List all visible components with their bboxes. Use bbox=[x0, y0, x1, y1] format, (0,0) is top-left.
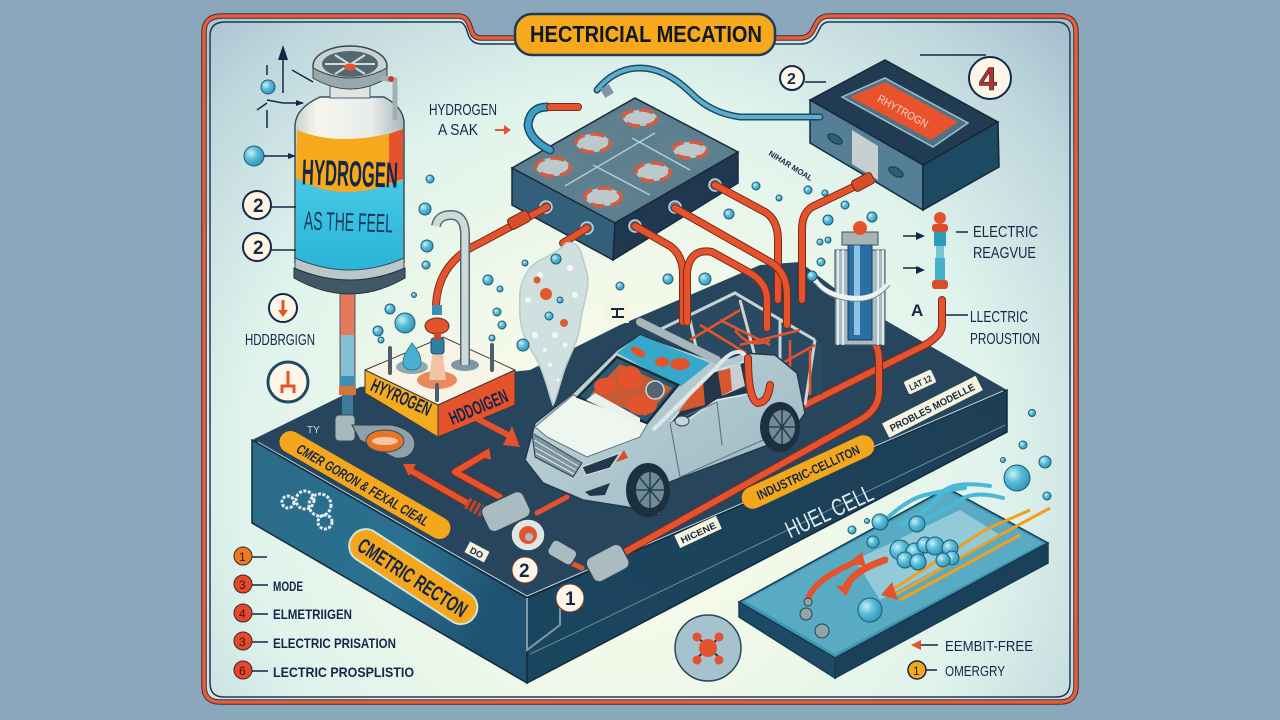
legend bottom left: ELMETRIIGEN bbox=[273, 606, 352, 622]
title: HECTRICIAL MECATION bbox=[530, 21, 762, 47]
gear icon bbox=[282, 491, 332, 529]
legend bottom left: 6 bbox=[239, 664, 246, 678]
flow arrows bbox=[403, 418, 640, 568]
steel nodes bbox=[800, 598, 829, 638]
right side valve column bbox=[903, 212, 968, 315]
stack ports bbox=[540, 179, 721, 234]
side windows bbox=[670, 360, 753, 423]
badge 4 bbox=[920, 55, 1011, 99]
badge 2 valve bbox=[512, 557, 538, 583]
label: electric proustion: LLECTRIC bbox=[970, 309, 1028, 326]
tank body bbox=[295, 97, 404, 262]
hydrogen box bbox=[365, 337, 515, 437]
badge 1 valve bbox=[556, 584, 584, 612]
yellow band bbox=[296, 130, 403, 192]
platform side face bbox=[527, 390, 1007, 683]
pipes: rear loop and long supply bbox=[625, 300, 942, 552]
reactor column bbox=[815, 221, 890, 345]
number badge 2: 2 bbox=[253, 196, 264, 217]
hydrogen box: HYYROGEN bbox=[367, 375, 434, 421]
pipe: blue coolant bbox=[528, 68, 820, 150]
label: hydrogen a sak bbox=[429, 102, 511, 139]
label: electric proustion bbox=[970, 309, 1040, 348]
legend bottom left: 1 bbox=[239, 550, 246, 564]
label: nihar moal: NIHAR MOAL bbox=[767, 149, 814, 183]
legend bottom right: EEMBIT-FREE bbox=[945, 638, 1033, 655]
molecule icon bbox=[675, 615, 741, 681]
bubbles bbox=[373, 175, 877, 351]
pill: cmetric recton: CMETRIC RECTON bbox=[353, 534, 471, 622]
down arrow icon bbox=[269, 294, 297, 322]
mirror bbox=[675, 416, 689, 426]
badge 2 battery: 2 bbox=[787, 71, 796, 88]
legend bottom left: 4 bbox=[239, 607, 246, 621]
lower slab: emission-free output bbox=[739, 410, 1051, 678]
fork icon bbox=[268, 362, 308, 402]
label: a: A bbox=[911, 301, 923, 320]
faucet and valve bbox=[425, 215, 465, 365]
platform front face bbox=[252, 440, 527, 683]
legend bottom left: 3 bbox=[239, 635, 246, 649]
front wheel bbox=[626, 463, 670, 517]
number badge 2 second bbox=[243, 233, 296, 261]
legend bottom right bbox=[908, 638, 1033, 680]
return arrow bbox=[455, 453, 500, 497]
legend bottom left: LECTRIC PROSPLISTIO bbox=[273, 664, 414, 680]
engine bay behind car bbox=[650, 293, 822, 405]
hood bbox=[535, 395, 648, 457]
legend bottom right: 1 bbox=[913, 664, 920, 678]
left callouts bbox=[243, 45, 315, 402]
grille and lamps bbox=[532, 433, 582, 477]
label: hydrogen a sak: HYDROGEN bbox=[429, 102, 497, 119]
label: electric reagvue: REAGVUE bbox=[973, 245, 1036, 262]
badge 4: 4 bbox=[979, 61, 997, 97]
pill: fuel cell label bbox=[275, 427, 455, 543]
badge 2 battery bbox=[780, 66, 826, 90]
supply column bbox=[335, 290, 415, 458]
tags: LAT 12 bbox=[907, 373, 933, 393]
platform bbox=[252, 262, 1007, 683]
legend bottom right: OMERGRY bbox=[945, 663, 1005, 680]
connector link bbox=[352, 425, 415, 458]
arrow to car bbox=[476, 418, 510, 436]
label: hydrogen a sak: A SAK bbox=[438, 122, 478, 139]
red valve bbox=[425, 318, 449, 334]
roof rack bbox=[640, 322, 717, 360]
door lines bbox=[670, 402, 763, 477]
badge 2 valve: 2 bbox=[519, 561, 530, 582]
text: HYDROGEN bbox=[301, 151, 399, 196]
pill: fuel cell label: CMER GORON & FEXAL CIEAL bbox=[294, 440, 432, 529]
fuel cell stack bbox=[512, 98, 738, 260]
tags: TY bbox=[307, 425, 320, 436]
tags: PROBLES MODELLE bbox=[888, 382, 977, 435]
legend bottom left: MODE bbox=[273, 578, 303, 594]
tank text as the feel: AS THE FEEL bbox=[303, 205, 393, 238]
plume speckles bbox=[525, 265, 578, 382]
sunroof panel bbox=[617, 335, 710, 387]
label: electric reagvue bbox=[973, 224, 1038, 262]
tags: HICENE bbox=[679, 520, 718, 545]
hose over door bbox=[748, 358, 770, 403]
number badge 2 second: 2 bbox=[253, 238, 264, 259]
pill: industric cellition: INDUSTRIC-CELLITON bbox=[754, 442, 862, 503]
pipes: stack to engine bbox=[436, 180, 868, 328]
box right face bbox=[438, 370, 515, 437]
car body bbox=[525, 335, 805, 515]
legend bottom left bbox=[234, 547, 414, 680]
wheel valve bbox=[313, 46, 395, 120]
tags: DO bbox=[468, 545, 485, 561]
badge 1 valve: 1 bbox=[565, 589, 576, 610]
orange flow arrows bbox=[884, 508, 1050, 600]
title bbox=[515, 14, 775, 55]
battery box: RHYTROGN bbox=[875, 93, 930, 131]
cyan band bbox=[296, 178, 403, 270]
platform top bbox=[252, 262, 1007, 598]
small icon square bbox=[605, 301, 629, 323]
number badge 2 bbox=[243, 191, 296, 219]
car bbox=[525, 322, 805, 517]
label hddbrgign: HDDBRGIGN bbox=[245, 332, 315, 349]
water bubbles cluster bbox=[848, 410, 1051, 622]
tank base bbox=[295, 258, 404, 284]
battery label bbox=[850, 82, 958, 140]
pill: cmetric recton bbox=[343, 523, 483, 630]
battery box bbox=[810, 60, 999, 210]
windshield with interior bbox=[578, 357, 678, 423]
water streams bbox=[880, 484, 1003, 525]
tags bbox=[307, 369, 983, 562]
box left face bbox=[365, 370, 438, 437]
tank bbox=[294, 46, 405, 294]
legend bottom left: ELECTRIC PRISATION bbox=[273, 635, 396, 651]
rear seats bbox=[629, 345, 690, 370]
huel cell label: HUEL CELL bbox=[781, 480, 878, 544]
arrow to link bbox=[410, 470, 467, 503]
label: electric proustion: PROUSTION bbox=[970, 331, 1040, 348]
plume of hydrogen gas bbox=[520, 243, 588, 405]
panel: frame bbox=[204, 16, 1076, 702]
label: electric reagvue: ELECTRIC bbox=[973, 224, 1038, 241]
legend bottom left: 3 bbox=[239, 578, 246, 592]
pipe couplings bbox=[506, 172, 876, 230]
rear wheel bbox=[760, 402, 800, 452]
small bubble with arrows bbox=[257, 48, 313, 128]
hydrogen box: HDDOIGEN bbox=[446, 386, 512, 430]
valves in front of car bbox=[467, 489, 632, 584]
stack cells bbox=[525, 104, 728, 215]
